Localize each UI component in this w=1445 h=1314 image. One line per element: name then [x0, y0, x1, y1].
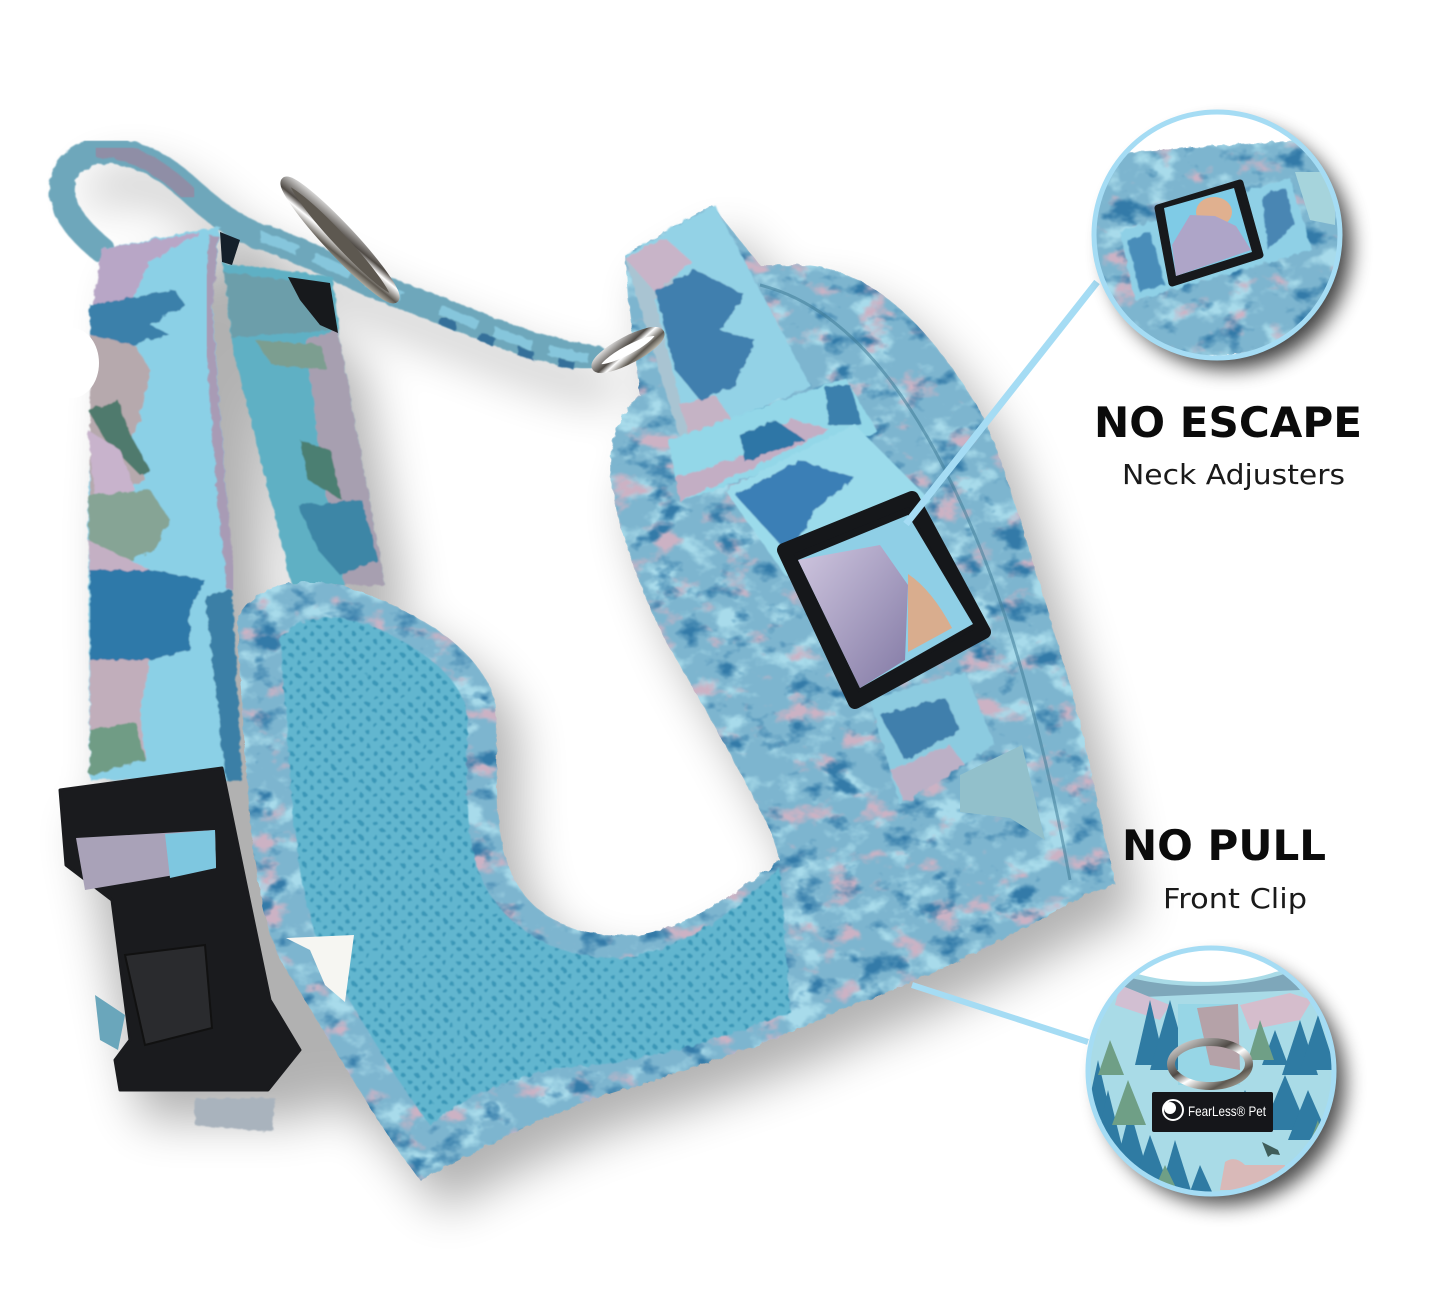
soft drop shadow behind harness [82, 182, 1138, 1210]
label: front clip: Front Clip [1163, 882, 1307, 915]
clip strap [1178, 1004, 1240, 1085]
label logo fill [1164, 1102, 1176, 1114]
harness body [237, 205, 1116, 1180]
keeper trees [740, 420, 805, 462]
buckle lower plate [125, 945, 212, 1045]
slider in circle [1158, 183, 1260, 283]
care tag [286, 935, 354, 1002]
strap highlights [260, 236, 590, 358]
green tree [88, 400, 150, 475]
circle shadow top [1107, 125, 1351, 369]
rock band [90, 335, 150, 500]
circle shadow bottom [1101, 961, 1345, 1205]
fabric print [1090, 971, 1332, 1192]
label: neck adjusters: Neck Adjusters [1122, 458, 1345, 491]
sun on webbing [908, 574, 952, 652]
harness illustration [45, 150, 1116, 1180]
detail circle: front clip [1085, 948, 1340, 1205]
lower strap trees [735, 460, 855, 555]
mesh lining [280, 618, 790, 1125]
label logo [1163, 1100, 1183, 1120]
label text: FearLess® Pet [1188, 1103, 1266, 1119]
strap trees right [1262, 188, 1295, 250]
pink mountains [1240, 993, 1312, 1030]
strap under buckle [195, 1098, 275, 1132]
top handle loop [62, 150, 595, 368]
heading: no escape: NO ESCAPE [1094, 398, 1362, 447]
keeper trees right [825, 385, 862, 425]
strap in circle [1120, 178, 1312, 300]
right blue lower [205, 590, 242, 780]
tail trees [880, 698, 960, 760]
keeper pink [675, 418, 830, 502]
strap print [1197, 1004, 1240, 1070]
rear strap black slider [288, 277, 338, 333]
strap below buckle, left [95, 995, 125, 1050]
lower adjust strap [725, 425, 930, 575]
heading: no pull: NO PULL [1122, 821, 1326, 870]
light panel corner [1295, 172, 1335, 225]
strap pink low [680, 395, 735, 440]
dark junction [220, 232, 240, 265]
small front ring [592, 325, 664, 375]
webbing in slider [1164, 188, 1252, 276]
circle ring [1094, 112, 1340, 358]
bottom mountain and sun [1220, 1159, 1285, 1190]
lilac band [88, 430, 135, 500]
circle ring [1088, 948, 1334, 1194]
green band [88, 490, 170, 560]
pink mountains left [1115, 985, 1170, 1020]
webbing through slider [798, 515, 973, 688]
strap trees left [1127, 232, 1165, 292]
neck adjuster slider [784, 498, 984, 702]
slider frame [784, 498, 984, 702]
large D-ring [277, 174, 403, 306]
strap dark tree [655, 270, 755, 400]
grey-blue panel [960, 745, 1045, 840]
main back strap [88, 226, 242, 780]
strap in buckle [76, 830, 216, 890]
strap mottled left [625, 240, 690, 445]
strap dark tree marks [440, 320, 590, 368]
detail circle: neck adjuster [1090, 112, 1345, 358]
vest seam [760, 285, 1070, 880]
tree clusters [1092, 1000, 1332, 1192]
callout line: neck adjuster [906, 282, 1097, 524]
front D-ring [1171, 1042, 1249, 1086]
lilac band lower [88, 540, 150, 580]
elastic keeper [668, 378, 878, 502]
sun in slider [1196, 197, 1232, 222]
green trees [1098, 1020, 1319, 1186]
upper dark band [1124, 974, 1300, 997]
infographic canvas [48, 109, 1367, 1226]
rear strap [223, 263, 385, 585]
handle purple tint [100, 150, 190, 195]
buckle body [60, 768, 300, 1090]
tail pink [890, 745, 965, 803]
side release buckle [60, 768, 300, 1090]
callout line: front clip [912, 985, 1088, 1042]
bird [1262, 1142, 1280, 1157]
blue trees [90, 570, 205, 660]
white blob [45, 328, 99, 398]
strap highlight [165, 830, 216, 878]
mountain on webbing [798, 545, 908, 688]
pink band left [90, 232, 200, 320]
tree group upper [90, 290, 185, 345]
strap stitched edge [208, 235, 232, 590]
strap pink patch [625, 238, 692, 292]
upper vest strap [625, 205, 810, 445]
green low [90, 722, 145, 775]
fabric background [1090, 140, 1345, 358]
mountain in slider [1172, 215, 1251, 276]
lower left rock [90, 660, 150, 775]
strap tail [870, 672, 995, 805]
FearLess Pet label [1152, 1092, 1273, 1132]
